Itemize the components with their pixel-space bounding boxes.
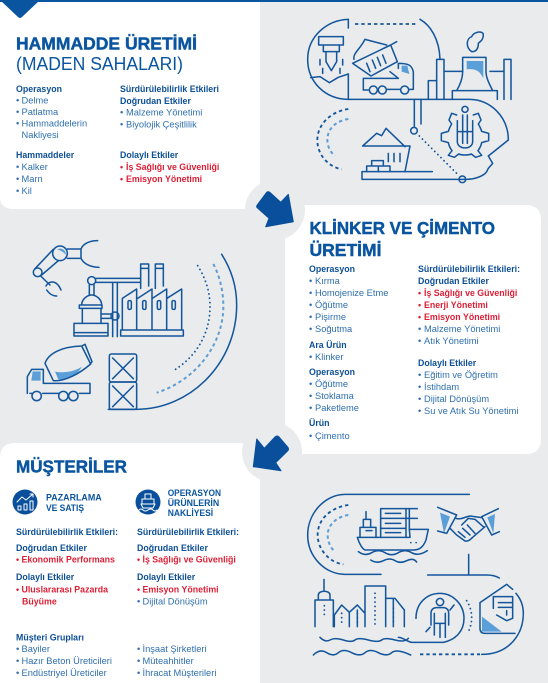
text block: sustainability impacts, raw material: Emisyon Yönetimi: [126, 174, 202, 184]
subheading: marketing and sales: VE SATIŞ: [46, 503, 84, 513]
icon: gear with H logo: [441, 106, 489, 157]
text block: transport impacts: Dijital Dönüşüm: [142, 596, 208, 606]
text block: operations and raw materials: Operasyon: [16, 84, 62, 94]
text block: customer groups: •: [16, 644, 19, 654]
text block: clinker sustainability impacts: Atık Yönetimi: [424, 336, 479, 346]
text block: transport impacts: İş Sağlığı ve Güvenliği: [142, 555, 236, 565]
text block: clinker sustainability impacts: •: [418, 336, 421, 346]
text block: marketing impacts: Dolaylı Etkiler: [16, 572, 75, 582]
text block: marketing impacts: Ekonomik Performans: [22, 555, 115, 565]
icon: container ship: [357, 509, 428, 562]
icon: industrial machine and factory: [74, 264, 183, 337]
text block: clinker sustainability impacts: •: [418, 406, 421, 416]
text block: clinker sustainability impacts: Dolaylı Etkiler: [418, 358, 477, 368]
text block: clinker operations and products: •: [309, 312, 312, 322]
icon: handshake: [438, 507, 499, 541]
icon: marketing chart badge: [12, 490, 38, 514]
text block: marketing impacts: Uluslararası Pazarda: [22, 585, 108, 595]
text block: clinker operations and products: Ara Ürün: [309, 340, 347, 350]
subheading: operations product transport: ÜRÜNLERİN: [168, 498, 220, 508]
text block: transport impacts: Doğrudan Etkiler: [137, 543, 208, 553]
subheading: marketing and sales: [46, 493, 102, 513]
text block: marketing impacts: Büyüme: [22, 596, 57, 606]
arrow: from clinker to customers: [253, 436, 288, 471]
text block: transport impacts: Emisyon Yönetimi: [142, 585, 219, 595]
text block: clinker sustainability impacts: Su ve Atık Su Yönetimi: [424, 406, 518, 416]
text block: operations and raw materials: Patlatma: [22, 107, 59, 117]
text block: sustainability impacts, raw material: Malzeme Yönetimi: [126, 108, 202, 118]
icon: stockpile and cart: [363, 128, 410, 172]
icon: ship badge: [136, 490, 160, 514]
text block: sustainability impacts, raw material: [120, 84, 219, 184]
text block: customer groups: •: [137, 644, 140, 654]
heading: clinker and cement production: KLİNKER VE ÇİMENTO: [310, 218, 495, 238]
text block: operations and raw materials: [16, 84, 87, 196]
text block: sustainability impacts, raw material: •: [120, 108, 123, 118]
text block: customer groups: Bayiler: [22, 644, 50, 654]
text block: customer groups: •: [16, 656, 19, 666]
text block: clinker operations and products: Stoklama: [315, 391, 355, 401]
text block: clinker sustainability impacts: Enerji Yönetimi: [424, 300, 488, 310]
illustration: robot arm, factory, mixer truck, crates: [27, 241, 237, 409]
text block: marketing impacts: •: [16, 555, 19, 565]
text block: customer groups: Müşteri Grupları: [16, 633, 84, 643]
text block: customer groups: •: [137, 656, 140, 666]
text block: operations and raw materials: •: [16, 96, 19, 106]
text block: clinker operations and products: •: [309, 300, 312, 310]
icon: cement mixer truck: [27, 344, 92, 401]
text block: operations and raw materials: Delme: [22, 96, 48, 106]
text block: clinker operations and products: Homojenize Etme: [315, 288, 388, 298]
text block: clinker operations and products: •: [309, 379, 312, 389]
text block: clinker operations and products: Klinker: [315, 352, 343, 362]
text block: operations and raw materials: Kalker: [22, 162, 48, 172]
illustration: ship, handshake, city, person, envelope: [308, 494, 523, 655]
text block: marketing impacts: [16, 527, 118, 606]
heading: raw material production: (MADEN SAHALARI): [16, 54, 183, 74]
text block: clinker operations and products: Operasyon: [309, 367, 355, 377]
text block: sustainability impacts, raw material: Doğrudan Etkiler: [120, 96, 191, 106]
text block: customer groups: İnşaat Şirketleri: [142, 644, 207, 654]
text block: clinker operations and products: Ürün: [309, 418, 330, 428]
text block: clinker sustainability impacts: •: [418, 324, 421, 334]
text block: sustainability impacts, raw material: Biyolojik Çeşitlilik: [126, 120, 197, 130]
subheading: operations product transport: OPERASYON: [168, 488, 221, 498]
text block: transport impacts: Dolaylı Etkiler: [137, 572, 196, 582]
text block: operations and raw materials: Hammaddelerin: [22, 118, 87, 128]
panel: customers background: [0, 443, 260, 683]
text block: transport impacts: Sürdürülebilirlik Etkileri:: [137, 527, 239, 537]
text block: operations and raw materials: Nakliyesi: [22, 130, 59, 140]
icon: person in circle: [398, 593, 464, 642]
subheading: operations product transport: NAKLİYESİ: [168, 508, 213, 518]
text block: clinker operations and products: Soğutma: [315, 324, 353, 334]
text block: operations and raw materials: •: [16, 174, 19, 184]
icon: waves: [313, 637, 411, 655]
illustration: mining, drill, truck, plant, gear: [308, 19, 511, 183]
text block: marketing impacts: Doğrudan Etkiler: [16, 543, 87, 553]
text block: operations and raw materials: Kil: [22, 186, 32, 196]
text block: transport impacts: •: [137, 555, 140, 565]
icon: drill: [311, 37, 348, 83]
text block: operations and raw materials: Marn: [22, 174, 43, 184]
text block: sustainability impacts, raw material: Dolaylı Etkiler: [120, 150, 179, 160]
text block: clinker sustainability impacts: Malzeme Yönetimi: [424, 324, 500, 334]
text block: clinker sustainability impacts: [418, 264, 520, 416]
text block: clinker sustainability impacts: •: [418, 288, 421, 298]
icon: dump truck: [353, 39, 413, 94]
icon: envelope: [480, 584, 523, 654]
text block: clinker operations and products: •: [309, 391, 312, 401]
text block: clinker operations and products: Öğütme: [315, 300, 348, 310]
notch: circle behind second arrow: [242, 422, 302, 482]
text block: clinker operations and products: •: [309, 431, 312, 441]
top bar with triangle marker: [0, 0, 548, 18]
text block: clinker sustainability impacts: Eğitim ve Öğretim: [424, 370, 498, 380]
text block: customer groups: İhracat Müşterileri: [142, 668, 216, 678]
heading: customers: MÜŞTERİLER: [16, 457, 127, 477]
subheading: marketing and sales: PAZARLAMA: [46, 493, 102, 503]
text block: customer groups: [16, 633, 216, 678]
text block: transport impacts: •: [137, 596, 140, 606]
text block: operations and raw materials: Hammaddeler: [16, 150, 75, 160]
text block: clinker operations and products: •: [309, 276, 312, 286]
subheading: operations product transport: [168, 488, 221, 518]
notch: circle behind first arrow: [245, 180, 305, 240]
heading: raw material production: [16, 34, 197, 74]
text block: clinker operations and products: •: [309, 403, 312, 413]
text block: clinker operations and products: •: [309, 352, 312, 362]
heading: raw material production: HAMMADDE ÜRETİMİ: [16, 34, 197, 54]
text block: transport impacts: •: [137, 585, 140, 595]
icon: cooling tower plant: [428, 32, 511, 99]
text block: clinker sustainability impacts: İstihdam: [424, 382, 459, 392]
text block: clinker operations and products: •: [309, 288, 312, 298]
text block: clinker operations and products: Öğütme: [315, 379, 348, 389]
text block: clinker operations and products: Pişirme: [315, 312, 346, 322]
icon: skyline: [315, 579, 404, 627]
text block: clinker sustainability impacts: Sürdürülebilirlik Etkileri:: [418, 264, 520, 274]
text block: clinker operations and products: Operasyon: [309, 264, 355, 274]
text block: sustainability impacts, raw material: İş Sağlığı ve Güvenliği: [126, 162, 219, 172]
text block: clinker sustainability impacts: Dijital Dönüşüm: [424, 394, 489, 404]
heading: clinker and cement production: [310, 218, 495, 260]
text block: sustainability impacts, raw material: •: [120, 120, 123, 130]
text block: transport impacts: [137, 527, 239, 606]
text block: marketing impacts: Sürdürülebilirlik Etkileri:: [16, 527, 118, 537]
text block: clinker sustainability impacts: İş Sağlığı ve Güvenliği: [424, 288, 517, 298]
text block: clinker operations and products: Paketleme: [315, 403, 359, 413]
text block: clinker operations and products: •: [309, 324, 312, 334]
text block: customer groups: Hazır Beton Üreticileri: [22, 656, 112, 666]
text block: sustainability impacts, raw material: •: [120, 174, 123, 184]
text block: customer groups: Endüstriyel Üreticiler: [22, 668, 107, 678]
text block: marketing impacts: •: [16, 585, 19, 595]
text block: sustainability impacts, raw material: •: [120, 162, 123, 172]
text block: clinker operations and products: Çimento: [315, 431, 350, 441]
text block: clinker sustainability impacts: •: [418, 394, 421, 404]
text block: clinker sustainability impacts: •: [418, 382, 421, 392]
arrow: from raw material to clinker: [257, 192, 293, 227]
text block: operations and raw materials: •: [16, 186, 19, 196]
text block: customer groups: •: [137, 668, 140, 678]
icon: robot arm: [33, 241, 99, 296]
icon: stacked crates: [109, 354, 137, 409]
panel: clinker and cement production background: [285, 205, 541, 454]
text block: clinker sustainability impacts: •: [418, 370, 421, 380]
text block: clinker sustainability impacts: Emisyon Yönetimi: [424, 312, 500, 322]
text block: operations and raw materials: •: [16, 107, 19, 117]
text block: customer groups: Müteahhitler: [142, 656, 194, 666]
text block: clinker operations and products: Kırma: [315, 276, 341, 286]
text block: operations and raw materials: •: [16, 162, 19, 172]
text block: customer groups: •: [16, 668, 19, 678]
text block: operations and raw materials: •: [16, 118, 19, 128]
text block: clinker sustainability impacts: •: [418, 312, 421, 322]
text block: clinker sustainability impacts: Doğrudan Etkiler: [418, 276, 489, 286]
text block: clinker sustainability impacts: •: [418, 300, 421, 310]
text block: clinker operations and products: [309, 264, 388, 441]
text block: sustainability impacts, raw material: Sürdürülebilirlik Etkileri: [120, 84, 219, 94]
panel: raw material production background: [0, 0, 260, 209]
heading: clinker and cement production: ÜRETİMİ: [310, 240, 382, 260]
